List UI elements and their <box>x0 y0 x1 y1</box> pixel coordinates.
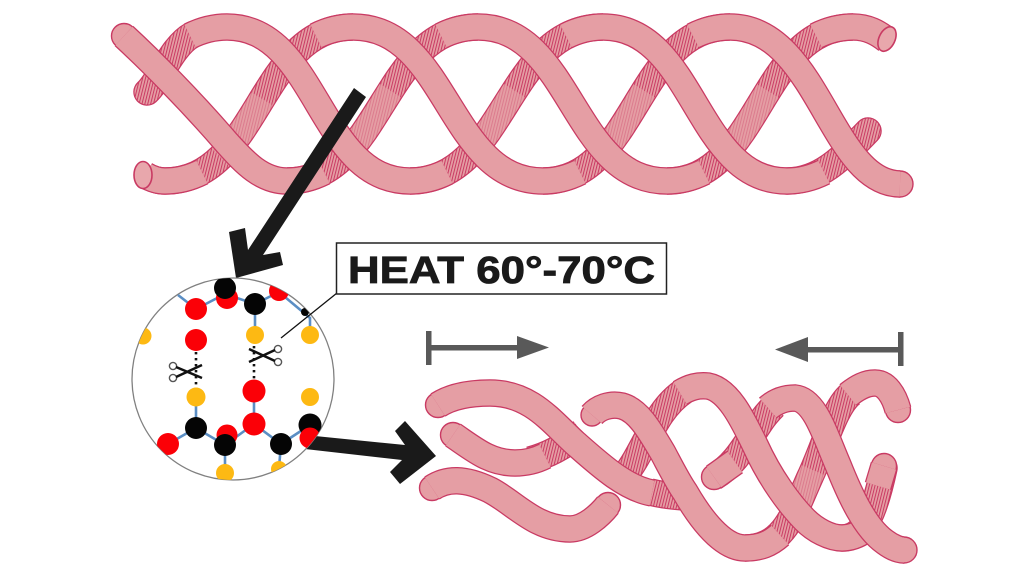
leader line from label to bond <box>281 293 337 338</box>
red atom at arrow start <box>300 428 320 448</box>
top helix: intact twisted strands <box>112 24 913 197</box>
dotted broken bonds <box>196 346 254 386</box>
heat label box <box>336 243 666 294</box>
gray arrow pulling right <box>426 331 549 365</box>
arrow: circle to unravelled helix <box>305 421 436 484</box>
icon: right scissors <box>249 345 282 366</box>
icon: left scissors <box>169 362 202 382</box>
yellow atoms <box>134 326 319 482</box>
back strand segments with hatching <box>145 27 868 181</box>
loose end caps <box>420 392 917 563</box>
strand end caps <box>112 24 913 197</box>
black atoms <box>185 277 322 456</box>
front strand segments <box>124 27 900 184</box>
open tube ends <box>134 24 900 189</box>
arrow: helix down to zoomed circle <box>229 88 366 278</box>
zoomed circle: molecular bonds <box>132 277 334 482</box>
bottom helix: partly unravelled strands <box>420 383 917 563</box>
front segments <box>432 383 904 550</box>
blue bonds <box>176 294 312 464</box>
red atoms <box>157 281 289 455</box>
heat label box: HEAT 60°-70°C <box>348 250 655 292</box>
gray arrow pulling left <box>775 332 904 366</box>
back segments with hatching <box>530 391 884 548</box>
